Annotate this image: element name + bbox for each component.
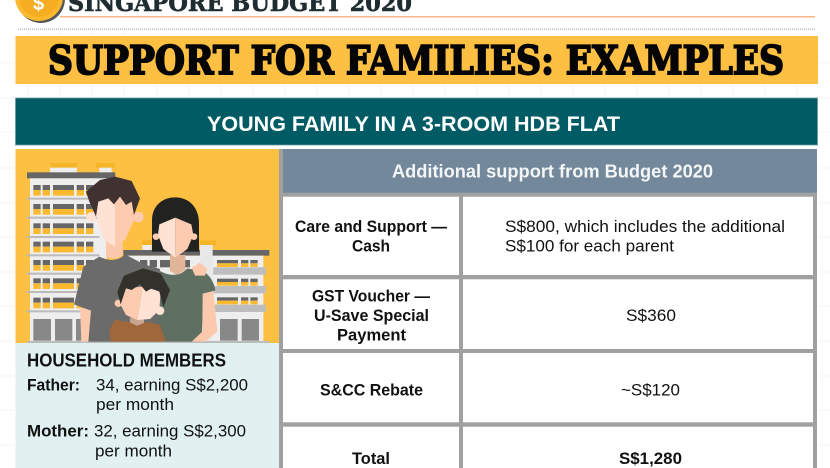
mother details: Mother: — [27, 422, 89, 441]
icon: boy — [109, 268, 170, 342]
subtitle text: YOUNG FAMILY IN A 3-ROOM HDB FLAT — [207, 113, 620, 136]
icon: HDB flats — [27, 163, 270, 343]
row: S&CC rebate — [283, 353, 813, 422]
row: S&CC rebate: S&CC Rebate — [320, 381, 423, 400]
panel: household members — [16, 343, 279, 468]
father details — [27, 376, 248, 414]
header: Singapore Budget 2020 — [15, 0, 815, 29]
row: S&CC rebate: ~S$120 — [621, 381, 680, 400]
row: GST voucher: S$360 — [626, 306, 676, 325]
row: care and support: S$100 for each parent — [505, 237, 674, 256]
subtitle banner — [16, 98, 818, 145]
mother details: per month — [95, 442, 172, 461]
row: GST voucher: Payment — [337, 326, 406, 344]
icon: mother — [152, 197, 217, 342]
row: care and support: S$800, which includes the additional — [505, 217, 785, 236]
row: GST voucher — [283, 279, 813, 349]
panel: additional support table — [279, 149, 817, 468]
father details: 34, earning S$2,200 — [96, 376, 248, 395]
icon: dollar coin — [15, 0, 65, 23]
father details: per month — [96, 395, 174, 414]
mother details — [27, 422, 246, 461]
row: GST voucher: GST Voucher — — [312, 287, 430, 306]
icon: father — [74, 177, 160, 342]
row: care and support: Cash — [352, 237, 390, 256]
row: total: S$1,280 — [619, 449, 682, 468]
row: care and support — [283, 197, 813, 275]
row: care and support: Care and Support — — [295, 217, 447, 236]
mother details: 32, earning S$2,300 — [94, 422, 246, 441]
panel: family illustration — [16, 149, 279, 343]
heading: household members: HOUSEHOLD MEMBERS — [27, 350, 226, 370]
row: total — [283, 427, 813, 468]
row: GST voucher: U-Save Special — [314, 306, 429, 325]
title banner — [16, 36, 818, 84]
father details: Father: — [27, 376, 80, 395]
row: total: Total — [352, 449, 390, 468]
table header: Additional support from Budget 2020 — [392, 162, 713, 182]
table header — [283, 149, 817, 193]
